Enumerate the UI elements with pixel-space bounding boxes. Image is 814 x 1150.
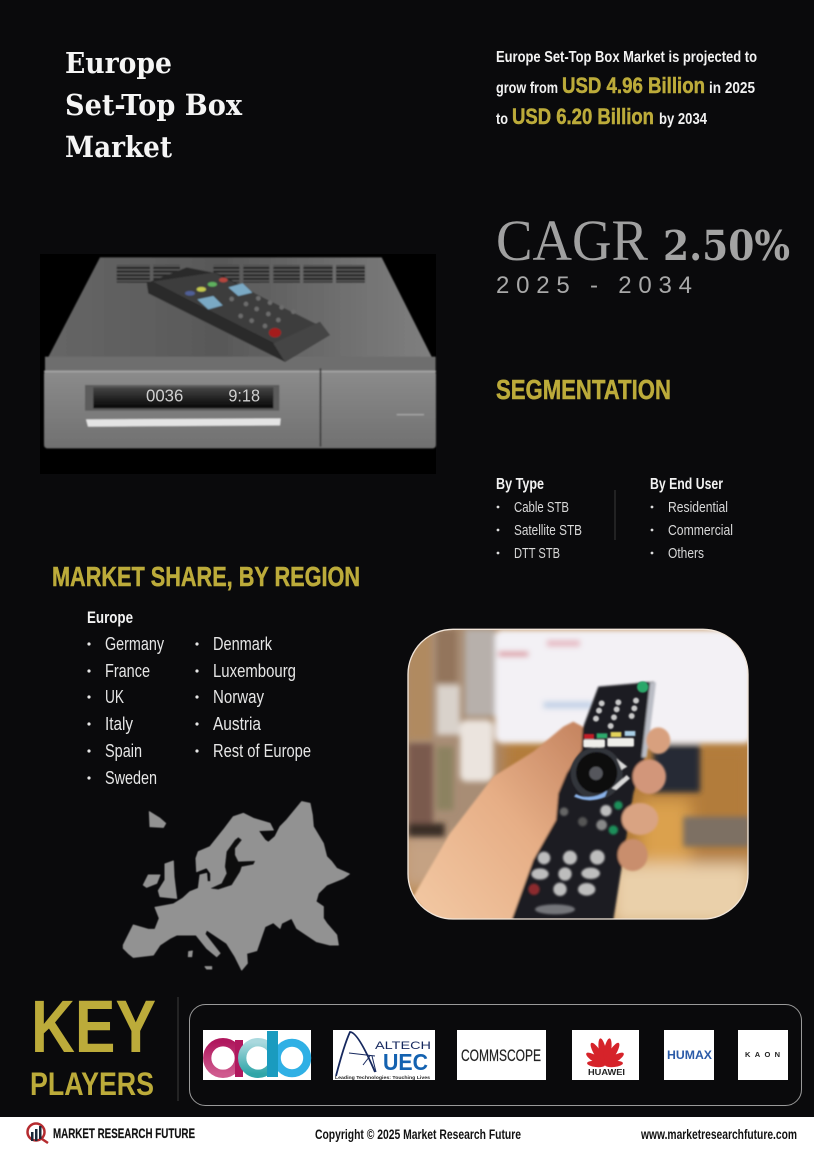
region list: Denmark	[213, 634, 273, 654]
logo: Altech UEC: ALTECH	[375, 1040, 431, 1052]
key players heading: KEY	[31, 985, 156, 1068]
region list: Germany	[105, 634, 164, 654]
region list: Sweden	[105, 768, 157, 788]
logo: ADB	[203, 1030, 311, 1080]
logo: Altech UEC: UEC	[383, 1049, 428, 1075]
logo: Humax	[664, 1030, 714, 1080]
region list: Spain	[105, 741, 142, 761]
image: set-top box with remote: 9:18	[228, 386, 260, 406]
segmentation: by end user: By End User	[650, 476, 723, 493]
footer	[0, 1117, 814, 1150]
segmentation heading: SEGMENTATION	[496, 374, 671, 405]
logo: Altech UEC: Leading Technologies: Touching Lives	[335, 1075, 431, 1080]
region list: Luxembourg	[213, 661, 296, 681]
market share heading: MARKET SHARE, BY REGION	[52, 561, 360, 592]
logo: Altech UEC	[333, 1030, 435, 1080]
segmentation: by end user: Commercial	[668, 523, 733, 539]
CAGR callout: 2025 - 2034	[496, 272, 692, 299]
CAGR callout	[496, 208, 790, 299]
CAGR callout: CAGR	[496, 208, 648, 273]
logo: Humax: HUMAX	[667, 1050, 712, 1062]
key players heading: PLAYERS	[30, 1066, 154, 1102]
remote	[510, 682, 654, 920]
region list: Europe	[87, 608, 133, 627]
region list: Rest of Europe	[213, 741, 311, 761]
region list: Austria	[213, 714, 262, 734]
title: Europe	[65, 46, 172, 80]
market projection text: Europe Set-Top Box Market is projected to	[496, 49, 757, 66]
region list: Italy	[105, 714, 133, 734]
region list: France	[105, 661, 150, 681]
segmentation: by type: Satellite STB	[514, 523, 582, 539]
key players panel	[190, 1004, 802, 1106]
logo: CommScope	[457, 1030, 546, 1080]
segmentation: by end user	[650, 476, 733, 562]
map: Europe	[123, 802, 349, 970]
market projection text: to	[496, 111, 508, 128]
logo: Huawei: HUAWEI	[588, 1068, 625, 1077]
market projection text: by 2034	[659, 111, 707, 128]
market projection text	[496, 49, 757, 129]
region list	[87, 608, 311, 788]
market projection text: in 2025	[709, 80, 755, 97]
market projection text: USD 4.96 Billion	[562, 73, 705, 98]
title: Set-Top Box	[65, 88, 243, 122]
logo: Huawei	[572, 1030, 639, 1080]
segmentation: by type: Cable STB	[514, 500, 569, 516]
image: hand holding TV remote	[400, 620, 753, 927]
logo: Kaon: KAON	[745, 1050, 780, 1059]
market projection text: grow from	[496, 80, 558, 97]
market projection text: USD 6.20 Billion	[512, 104, 654, 129]
footer copyright: Copyright © 2025 Market Research Future	[315, 1127, 521, 1142]
region list: Norway	[213, 687, 264, 707]
CAGR callout: 2.50%	[663, 222, 790, 270]
logo: CommScope: COMMSCOPE	[461, 1046, 541, 1065]
segmentation: by end user: Residential	[668, 500, 728, 516]
icon: market research future logo	[28, 1124, 48, 1143]
image: set-top box with remote	[40, 254, 436, 474]
arm	[413, 722, 583, 920]
segmentation: by type	[496, 476, 582, 562]
title	[65, 46, 243, 164]
key players heading	[30, 985, 156, 1102]
image: set-top box with remote: 0036	[146, 386, 183, 406]
segmentation: by end user: Others	[668, 546, 704, 562]
segmentation: by type: By Type	[496, 476, 544, 493]
title: Market	[65, 130, 173, 164]
region list: UK	[105, 687, 124, 707]
logo: Kaon	[738, 1030, 788, 1080]
segmentation: by type: DTT STB	[514, 546, 560, 562]
footer brand: MARKET RESEARCH FUTURE	[53, 1125, 195, 1141]
